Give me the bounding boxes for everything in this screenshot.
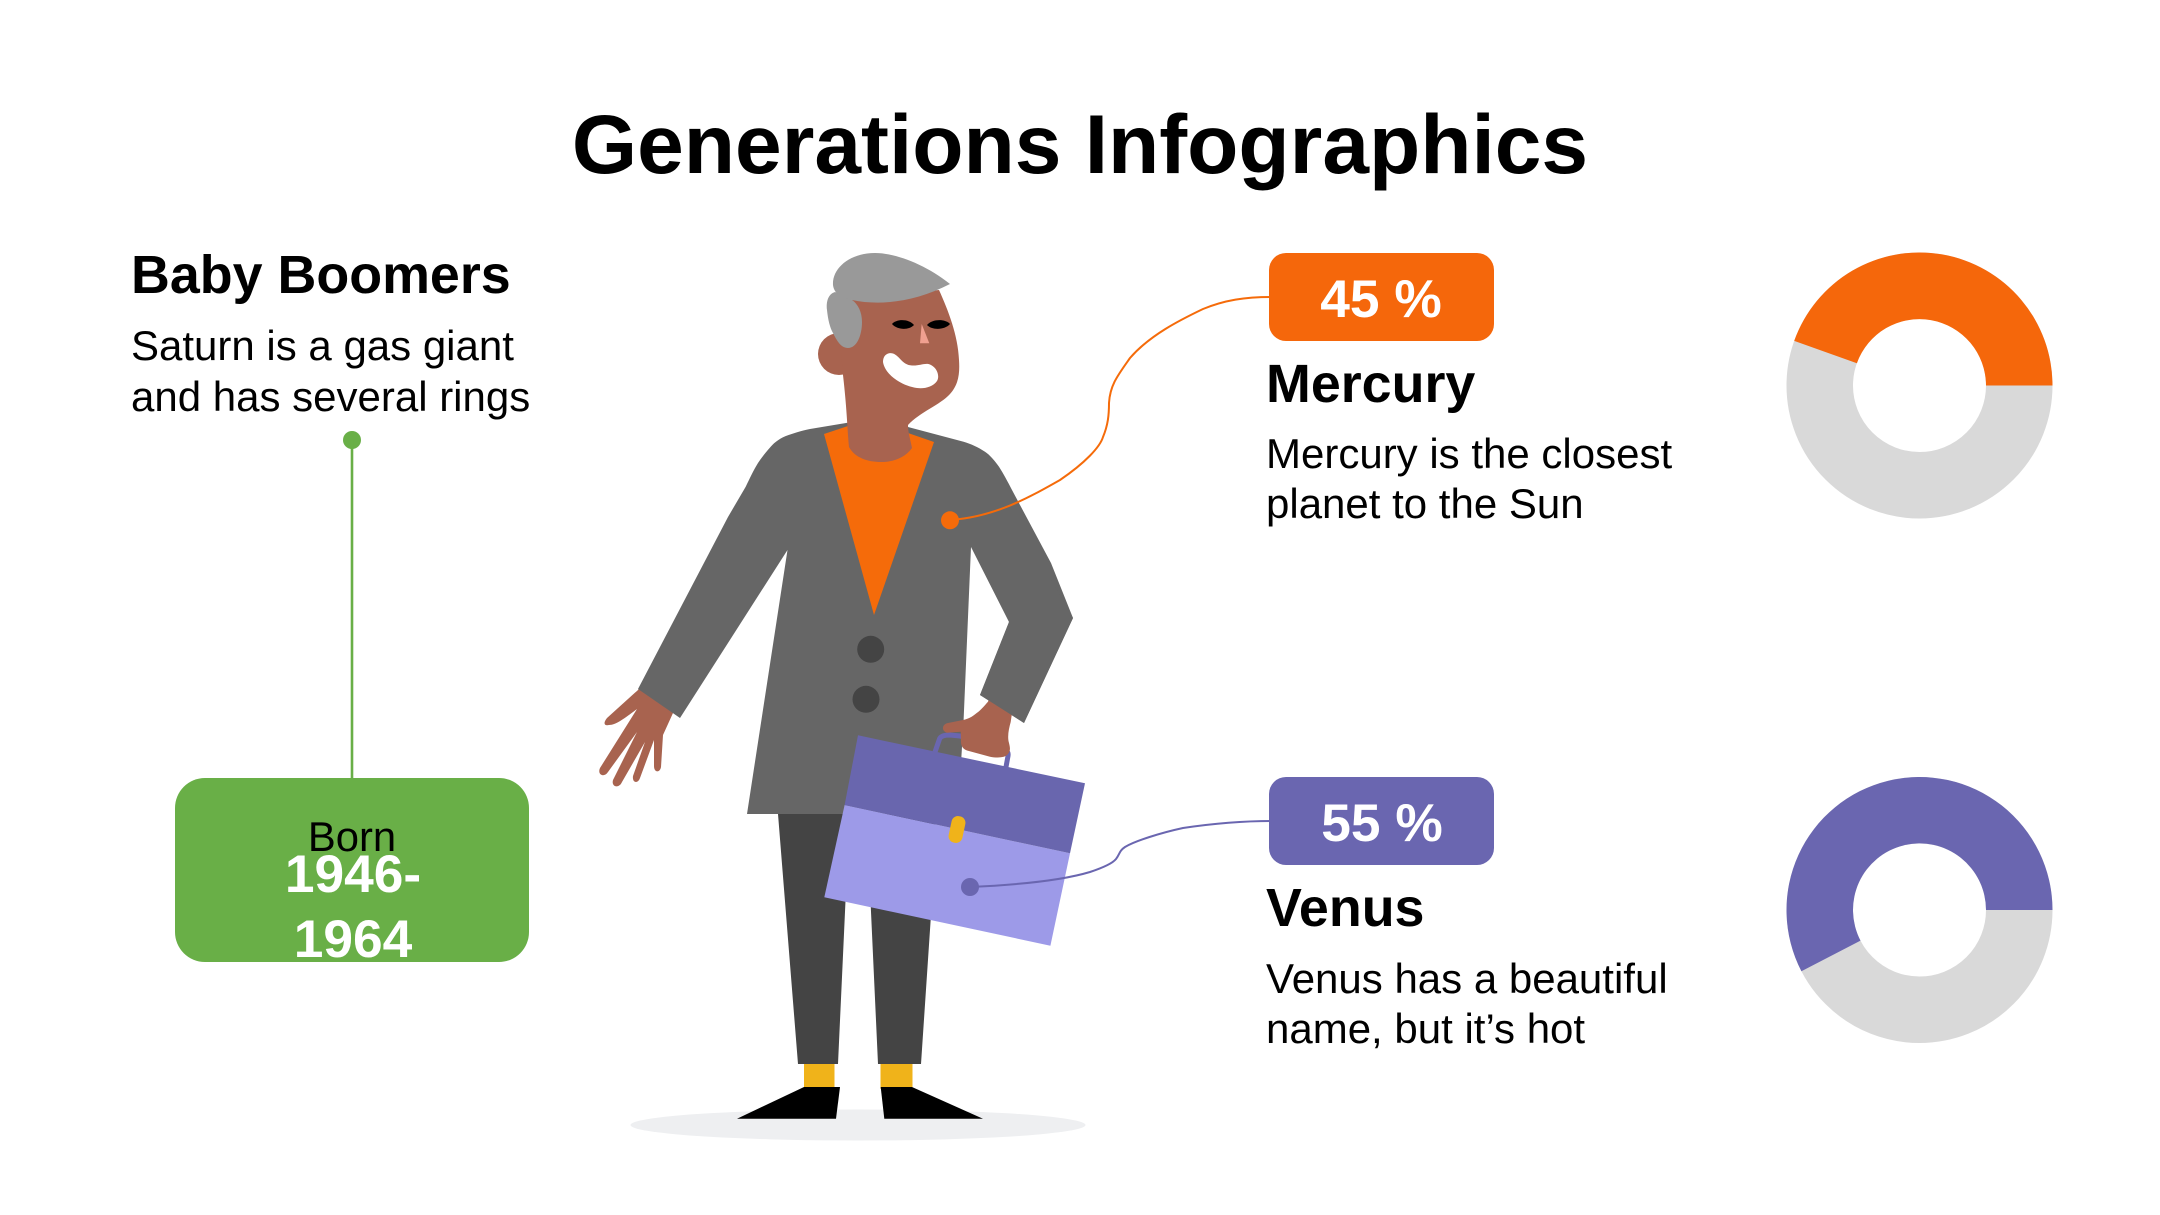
badge: 45 percent <box>1269 253 1494 341</box>
callout: born years <box>175 778 529 969</box>
briefcase handle <box>935 735 1008 767</box>
shirt <box>824 426 934 615</box>
callout: born years: 1964 <box>294 910 413 969</box>
top hair <box>833 253 950 303</box>
text block: saturn: Saturn is a gas giant <box>131 322 514 369</box>
heading: baby boomers: Baby Boomers <box>131 245 511 305</box>
text block: venus: name, but it’s hot <box>1266 1005 1585 1052</box>
buttons <box>852 636 884 713</box>
socks <box>804 1064 912 1089</box>
text block: mercury: planet to the Sun <box>1266 480 1584 527</box>
jacket <box>638 423 1073 814</box>
heading: venus: Venus <box>1266 878 1424 938</box>
shoes <box>737 1087 983 1119</box>
connector: green line with dot <box>343 431 361 780</box>
eyes <box>892 320 950 329</box>
briefcase <box>824 735 1085 946</box>
side hair <box>827 292 862 348</box>
illustration: man with briefcase <box>599 253 1086 1140</box>
face and neck <box>840 290 959 462</box>
badge: 55 percent: 55 % <box>1321 794 1443 853</box>
callout: born years: 1946- <box>285 845 421 904</box>
left hand <box>599 680 685 786</box>
badge: 55 percent <box>1269 777 1494 865</box>
callout: born years: Born <box>308 813 396 860</box>
donut chart: 45 percent <box>1794 252 2052 485</box>
panel: mercury <box>1266 252 2052 527</box>
badge: 45 percent: 45 % <box>1320 270 1442 329</box>
right sleeve <box>980 560 1073 723</box>
ear <box>818 333 860 375</box>
right hand <box>943 690 1020 757</box>
mouth <box>883 353 938 388</box>
connector: orange callout line <box>941 297 1271 529</box>
nose <box>920 324 929 343</box>
connector: purple callout line <box>961 821 1271 896</box>
heading: mercury: Mercury <box>1266 354 1475 414</box>
title: Generations Infographics <box>572 97 1588 191</box>
text block: saturn: and has several rings <box>131 373 530 420</box>
text block: mercury: Mercury is the closest <box>1266 430 1672 477</box>
panel: baby boomers <box>131 245 530 969</box>
trousers <box>778 814 935 1064</box>
panel: venus <box>1266 777 2052 1052</box>
donut chart: 55 percent <box>1786 777 2052 1010</box>
floor shadow <box>630 1110 1086 1140</box>
text block: venus: Venus has a beautiful <box>1266 955 1668 1002</box>
